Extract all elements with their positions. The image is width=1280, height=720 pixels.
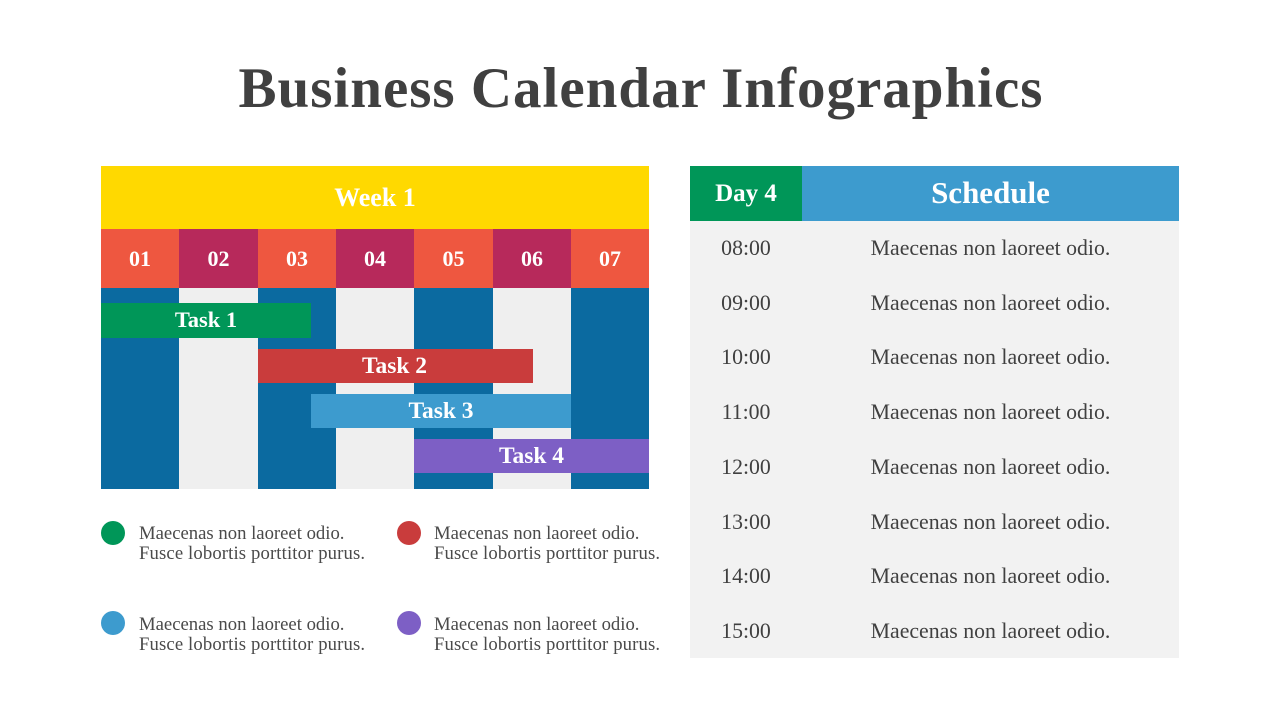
day 01: 01 <box>129 246 151 270</box>
row 10:00 <box>721 345 1110 369</box>
row 12:00: 12:00 <box>721 455 771 479</box>
day heading: Day 4 <box>715 180 777 206</box>
red dot <box>397 521 421 545</box>
row 13:00: 13:00 <box>721 510 771 534</box>
row 10:00: 10:00 <box>721 345 771 369</box>
legend text <box>434 614 660 654</box>
legend text: Maecenas non laoreet odio. <box>434 523 639 544</box>
blue dot <box>101 611 125 635</box>
column 05 <box>414 288 493 489</box>
legend: task 3 <box>101 611 365 654</box>
column 03 <box>258 288 336 489</box>
legend text: Fusce lobortis porttitor purus. <box>139 634 365 654</box>
task 1 bar <box>101 303 311 338</box>
legend: task 1 <box>101 521 365 564</box>
row 09:00 <box>721 291 1110 315</box>
row 15:00: Maecenas non laoreet odio. <box>871 619 1110 643</box>
row 11:00: Maecenas non laoreet odio. <box>871 400 1110 424</box>
row 12:00 <box>721 455 1110 479</box>
week header: Week 1 <box>334 182 416 212</box>
purple dot <box>397 611 421 635</box>
day 03: 03 <box>286 246 308 270</box>
row 09:00: 09:00 <box>721 291 771 315</box>
row 14:00: 14:00 <box>721 564 771 588</box>
task 4 bar: Task 4 <box>499 442 564 468</box>
row 08:00: Maecenas non laoreet odio. <box>871 236 1110 260</box>
row 11:00 <box>722 400 1110 424</box>
legend text: Maecenas non laoreet odio. <box>139 523 344 544</box>
day 04: 04 <box>364 246 386 270</box>
panel: week calendar <box>101 166 649 489</box>
day 02 <box>179 229 258 288</box>
column 01 <box>101 288 179 489</box>
row 12:00: Maecenas non laoreet odio. <box>871 455 1110 479</box>
row 15:00: 15:00 <box>721 619 771 643</box>
row 10:00: Maecenas non laoreet odio. <box>871 345 1110 369</box>
day 01 <box>101 229 179 288</box>
day 06: 06 <box>521 246 543 270</box>
row 14:00 <box>721 564 1110 588</box>
task 3 bar <box>311 394 571 428</box>
legend text: Maecenas non laoreet odio. <box>434 614 639 635</box>
schedule heading: Schedule <box>931 174 1050 210</box>
task 4 bar <box>414 439 649 473</box>
green dot <box>101 521 125 545</box>
day 06 <box>493 229 571 288</box>
legend text: Maecenas non laoreet odio. <box>139 614 344 635</box>
row 14:00: Maecenas non laoreet odio. <box>871 564 1110 588</box>
day 07: 07 <box>599 246 621 270</box>
day 07 <box>571 229 649 288</box>
column 07 <box>571 288 649 489</box>
panel: schedule <box>690 166 1179 658</box>
legend text: Fusce lobortis porttitor purus. <box>434 634 660 654</box>
row 13:00: Maecenas non laoreet odio. <box>871 510 1110 534</box>
row 13:00 <box>721 510 1110 534</box>
week header <box>101 166 649 229</box>
task 2 bar <box>258 349 533 383</box>
day 02: 02 <box>208 246 230 270</box>
legend: task 2 <box>397 521 660 564</box>
day 04 <box>336 229 414 288</box>
legend text <box>434 523 660 564</box>
day heading <box>690 166 802 221</box>
legend text <box>139 614 365 654</box>
row 15:00 <box>721 619 1110 643</box>
row 08:00 <box>721 236 1110 260</box>
task 1 bar: Task 1 <box>175 306 237 332</box>
row 11:00: 11:00 <box>722 400 770 424</box>
day 05 <box>414 229 493 288</box>
day 03 <box>258 229 336 288</box>
legend text <box>139 523 365 564</box>
legend: task 4 <box>397 611 660 654</box>
task 3 bar: Task 3 <box>408 398 474 424</box>
legend text: Fusce lobortis porttitor purus. <box>139 542 365 564</box>
day 05: 05 <box>442 246 464 270</box>
legend text: Fusce lobortis porttitor purus. <box>434 542 660 564</box>
task 2 bar: Task 2 <box>362 352 427 378</box>
row 09:00: Maecenas non laoreet odio. <box>871 291 1110 315</box>
row 08:00: 08:00 <box>721 236 771 260</box>
schedule heading <box>802 166 1179 221</box>
title: Business Calendar Infographics <box>239 57 1043 120</box>
